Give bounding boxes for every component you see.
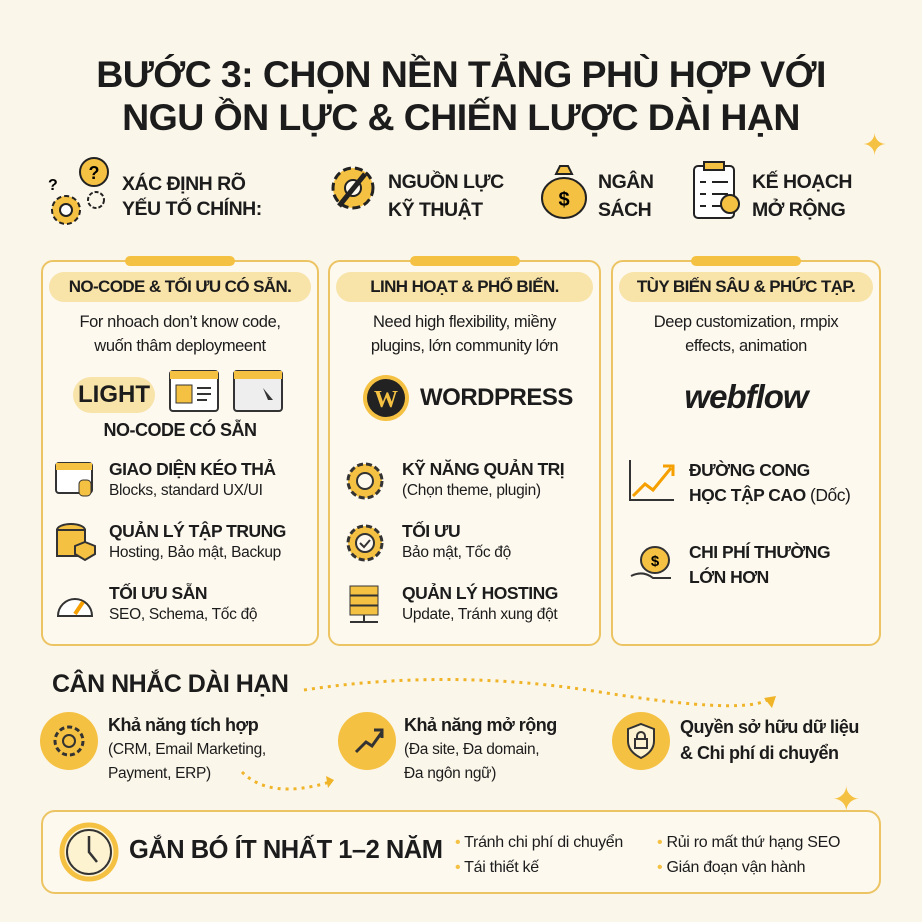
icon: gears question: ?	[88, 163, 100, 183]
description: plugins, lớn community lớn	[371, 337, 558, 355]
item 1	[55, 459, 276, 499]
item 3: Update, Tránh xung đột	[402, 606, 557, 623]
icon: wrench gear	[332, 166, 374, 210]
item 2	[346, 521, 511, 562]
icon: gears question	[48, 157, 109, 225]
item: higher cost: LỚN HƠN	[689, 567, 769, 587]
item: higher cost: CHI PHÍ THƯỜNG	[689, 542, 830, 562]
description: wuốn thâm deploymeent	[94, 337, 266, 355]
item: learning curve	[629, 460, 850, 505]
item 1	[346, 459, 564, 500]
icon: gears question: ?	[48, 177, 58, 194]
heading: long term: CÂN NHẮC DÀI HẠN	[52, 670, 288, 698]
item 2: Bảo mật, Tốc độ	[402, 544, 511, 561]
item 3	[57, 583, 257, 623]
icon: window image	[233, 370, 283, 412]
title: NGU ỒN LỰC & CHIẾN LƯỢC DÀI HẠN	[122, 96, 800, 138]
item 1: GIAO DIỆN KÉO THẢ	[109, 459, 276, 479]
icon: money bag	[541, 165, 587, 219]
icon: money bag: $	[558, 189, 570, 211]
item: integration	[40, 712, 266, 782]
heading: GẮN BÓ ÍT NHẤT 1–2 NĂM	[129, 836, 442, 864]
item: scalability: (Đa site, Đa domain,	[404, 741, 539, 758]
icon: clock	[60, 822, 118, 882]
description: effects, animation	[685, 337, 807, 355]
item 1: Blocks, standard UX/UI	[109, 482, 263, 499]
bullets right: • Rủi ro mất thứ hạng SEO	[657, 834, 840, 851]
text: budget	[598, 170, 653, 221]
panel: wordpress	[328, 260, 601, 646]
text: expansion plan: KẾ HOẠCH	[752, 171, 852, 193]
item: integration: Payment, ERP)	[108, 765, 211, 782]
description	[371, 313, 558, 355]
item: learning curve: HỌC TẬP CAO (Dốc)	[689, 485, 850, 505]
text: technical resources: NGUỒN LỰC	[388, 171, 504, 193]
header: TÙY BIẾN SÂU & PHỨC TẠP.	[637, 277, 855, 296]
title: BƯỚC 3: CHỌN NỀN TẢNG PHÙ HỢP VỚI	[96, 53, 826, 95]
sparkle: ✦	[832, 781, 860, 819]
text: key factors: XÁC ĐỊNH RÕ	[122, 173, 245, 195]
item 2	[56, 521, 286, 562]
description: Deep customization, rmpix	[654, 313, 838, 331]
item 1: KỸ NĂNG QUẢN TRỊ	[402, 459, 564, 479]
text: technical resources: KỸ THUẬT	[388, 199, 483, 221]
logo webflow: webflow	[684, 378, 808, 415]
sparkle: ✦	[862, 129, 887, 162]
item: data ownership	[612, 712, 859, 770]
logo wordpress	[363, 375, 573, 421]
item: integration: (CRM, Email Marketing,	[108, 741, 266, 758]
text: budget: NGÂN	[598, 171, 653, 193]
item: scalability	[338, 712, 557, 782]
text: technical resources	[388, 170, 504, 221]
logo LIGHT	[73, 377, 155, 413]
item: data ownership: Quyền sở hữu dữ liệu	[680, 717, 859, 737]
item: scalability: Đa ngôn ngữ)	[404, 765, 496, 782]
label: NO-CODE CÓ SẴN	[103, 420, 256, 440]
panel: commitment	[41, 810, 881, 894]
arrow: small dotted	[241, 771, 334, 790]
header	[336, 272, 593, 302]
description: For nhoach don’t know code,	[79, 313, 281, 331]
bullets left	[455, 834, 623, 876]
item 3: SEO, Schema, Tốc độ	[109, 606, 257, 623]
header: LINH HOẠT & PHỔ BIẾN.	[370, 277, 559, 296]
header	[619, 272, 873, 302]
description	[79, 313, 281, 355]
item 1: (Chọn theme, plugin)	[402, 482, 541, 499]
arrow: dotted curve	[304, 678, 776, 708]
text: key factors	[122, 172, 262, 220]
bullets left: • Tránh chi phí di chuyển	[455, 834, 623, 851]
bullets right: • Gián đoạn vận hành	[657, 859, 805, 876]
item 3: TỐI ƯU SẴN	[109, 583, 207, 603]
header	[49, 272, 311, 302]
item: data ownership: & Chi phí di chuyển	[680, 743, 839, 763]
text: expansion plan	[752, 170, 852, 221]
item 3: QUẢN LÝ HOSTING	[402, 583, 558, 603]
item 3	[350, 583, 558, 623]
title	[96, 53, 826, 138]
logo wordpress: WORDPRESS	[420, 384, 573, 411]
item 2: Hosting, Bảo mật, Backup	[109, 544, 281, 561]
logo wordpress: W	[374, 387, 398, 413]
description	[654, 313, 838, 355]
item: higher cost	[630, 542, 830, 587]
panel: webflow	[611, 260, 881, 646]
logo LIGHT: LIGHT	[78, 381, 150, 408]
header: NO-CODE & TỐI ƯU CÓ SẴN.	[69, 277, 291, 296]
item: integration: Khả năng tích hợp	[108, 715, 258, 735]
panel: no-code	[41, 260, 319, 646]
description: Need high flexibility, miềny	[373, 313, 556, 331]
item: learning curve: ĐƯỜNG CONG	[689, 460, 810, 480]
bullets right	[657, 834, 840, 876]
text: budget: SÁCH	[598, 199, 651, 221]
icon: window	[169, 370, 219, 412]
bullets left: • Tái thiết kế	[455, 859, 539, 876]
text: key factors: YẾU TỐ CHÍNH:	[122, 198, 262, 220]
item 2: QUẢN LÝ TẬP TRUNG	[109, 521, 286, 541]
item: higher cost: $	[651, 553, 660, 570]
text: expansion plan: MỞ RỘNG	[752, 199, 845, 221]
icon: clipboard	[693, 161, 740, 219]
item: scalability: Khả năng mở rộng	[404, 715, 557, 735]
item 2: TỐI ƯU	[402, 521, 460, 541]
